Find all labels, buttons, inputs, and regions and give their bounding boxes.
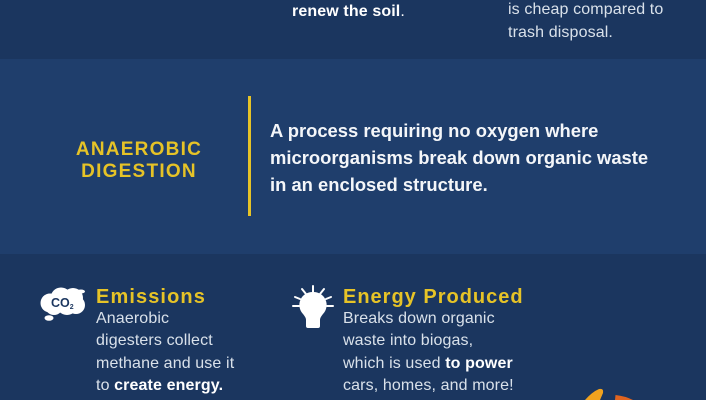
text: emissions description: Anaerobic [96,310,169,327]
text: energy description: waste into biogas, [343,332,473,349]
panel: energy produced [292,285,524,394]
text: energy description: which is used to power [343,355,513,372]
heading: emissions: Emissions [96,286,206,308]
text: cheap compared to trash disposal: trash disposal. [508,24,613,41]
heading: anaerobic digestion: DIGESTION [81,161,197,182]
text: emissions description: digesters collect [96,332,213,349]
text: cheap compared to trash disposal [508,1,663,41]
icon: CO2 cloud [40,288,85,321]
text: definition: A process requiring no oxygen where [270,120,598,141]
icon: light bulb [292,285,334,328]
heading: energy produced: Energy Produced [343,286,524,308]
text: emissions description: methane and use it [96,355,234,372]
icon: CO2 cloud: CO [51,296,70,310]
text: energy description: cars, homes, and more! [343,377,514,394]
text: definition: in an enclosed structure. [270,174,488,195]
text: cheap compared to trash disposal: is cheap compared to [508,1,663,18]
vertical divider [248,96,251,216]
text: energy description [343,310,514,394]
icon: CO2 cloud: 2 [70,304,74,311]
text: definition: microorganisms break down organic waste [270,147,648,168]
heading: anaerobic digestion [76,139,202,182]
text: emissions description: to create energy. [96,377,223,394]
text: energy description: Breaks down organic [343,310,495,327]
panel: anaerobic digestion definition [0,59,706,254]
panel: top band [0,0,706,59]
icon: orange shapes at bottom edge [585,388,633,400]
panel: emissions [40,286,234,394]
text: emissions description [96,310,234,394]
text: definition [270,120,648,195]
heading: anaerobic digestion: ANAEROBIC [76,139,202,160]
text: renew the soil: renew the soil. [292,3,405,20]
